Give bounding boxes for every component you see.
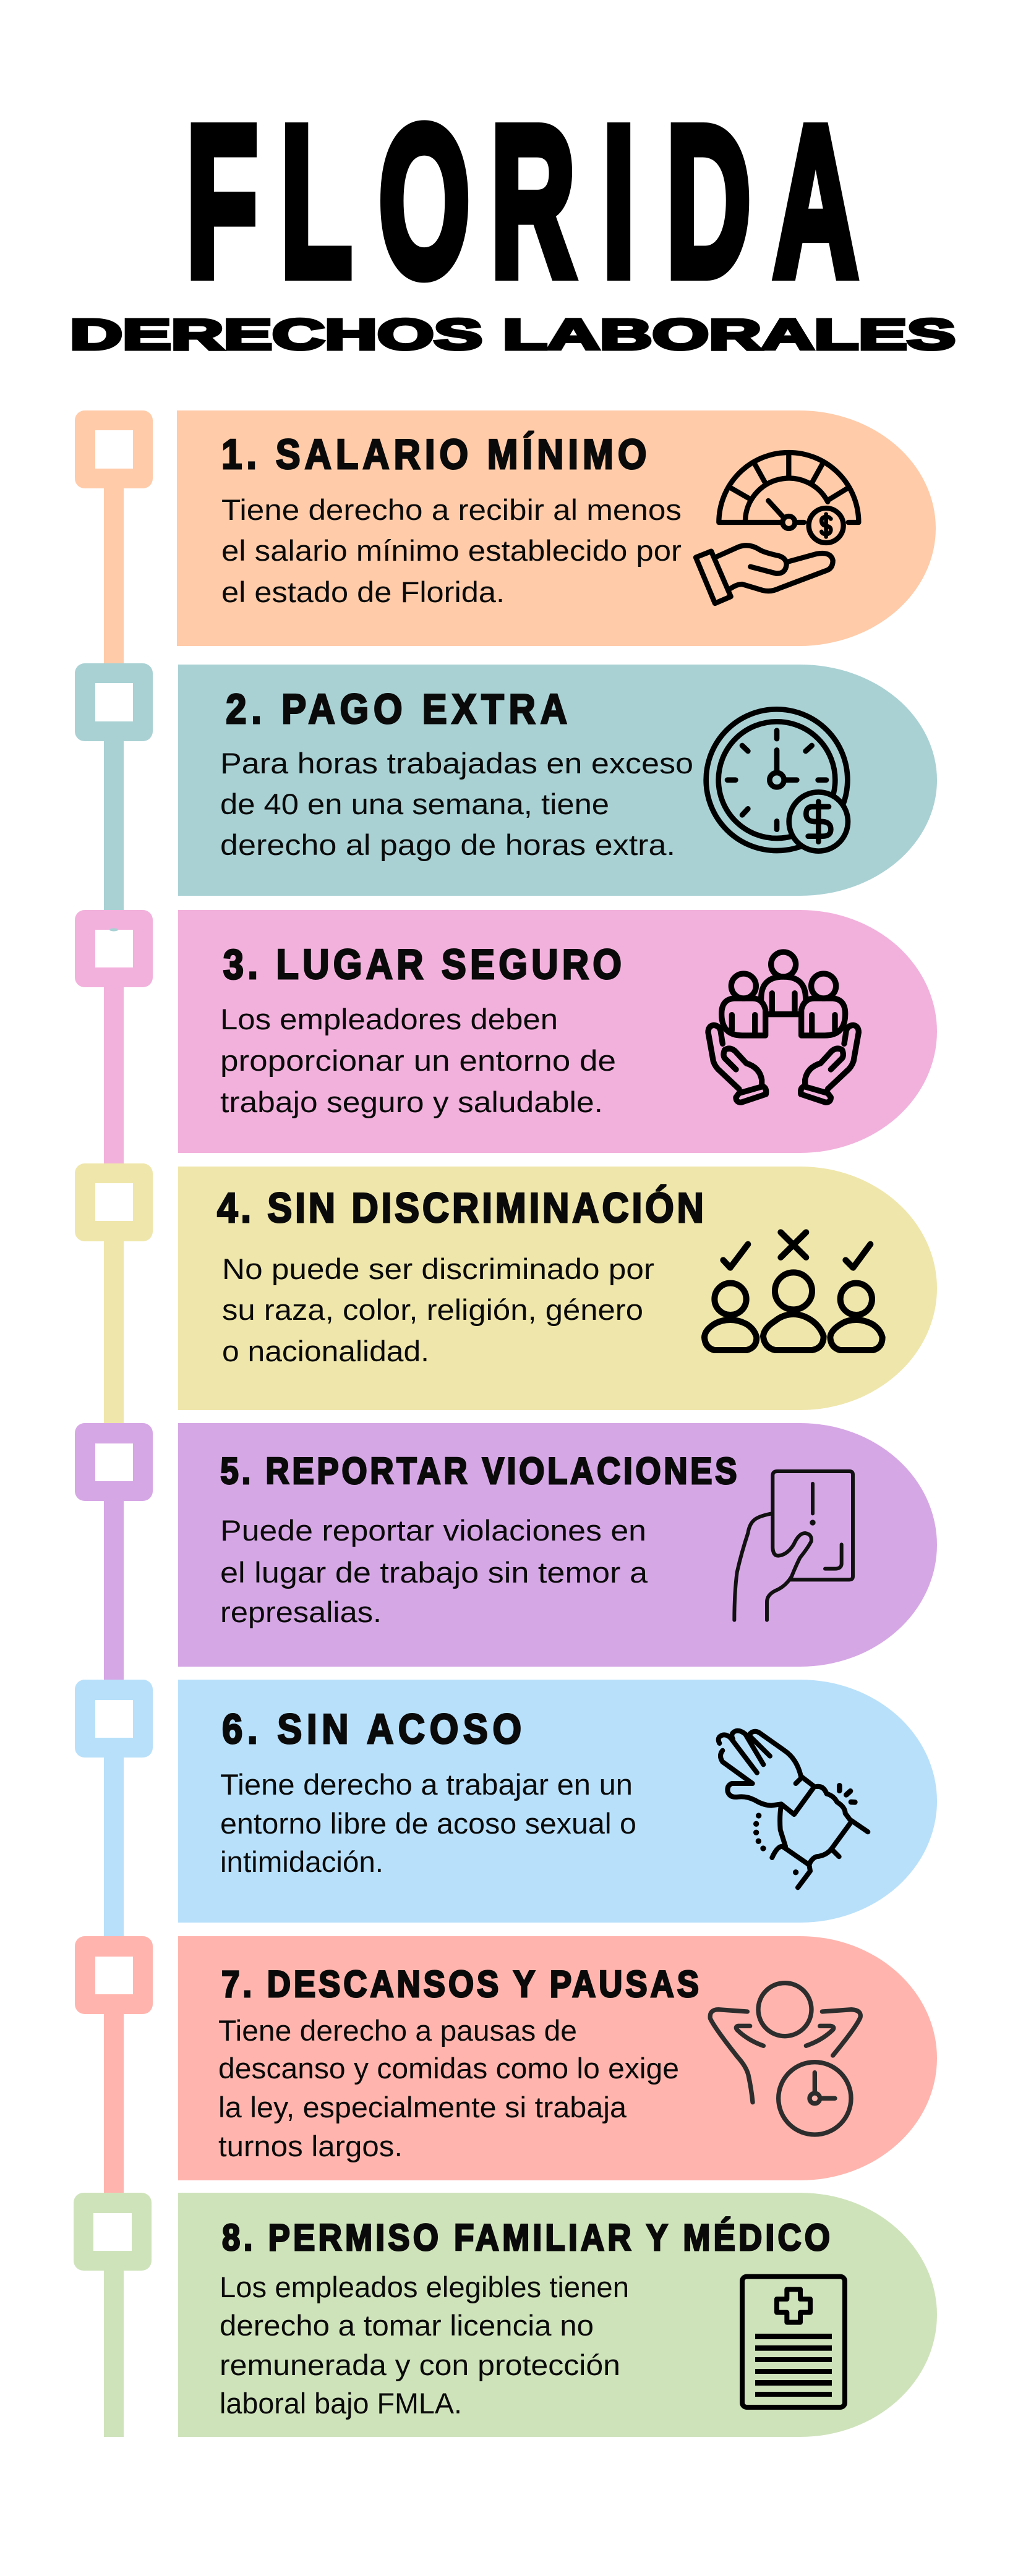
body text 5 [220, 1514, 648, 1628]
panel: 2 pago extra [75, 663, 937, 915]
heading 7: 7. DESCANSOS Y PAUSAS [221, 1963, 699, 2005]
body text 3: proporcionar un entorno de [220, 1044, 616, 1077]
body text 7: Tiene derecho a pausas de [218, 2014, 577, 2047]
body text 7 [218, 2014, 679, 2162]
subtitle: DERECHOS LABORALES [70, 310, 956, 359]
card background 6 [178, 1680, 937, 1923]
heading 3: 3. LUGAR SEGURO [223, 940, 622, 988]
icon: relaxing person with clock [710, 1983, 860, 2135]
icon: clock with dollar coin [706, 709, 848, 851]
body text 4 [222, 1252, 654, 1367]
card background 2 [178, 665, 937, 896]
icon: medical document [742, 2277, 845, 2407]
body text 1: Tiene derecho a recibir al menos [221, 493, 682, 526]
icon: hand gripping wrist [719, 1731, 868, 1887]
body text 7: descanso y comidas como lo exige [218, 2052, 679, 2085]
card background 4 [178, 1167, 937, 1410]
timeline marker 3 [75, 910, 153, 987]
body text 5: el lugar de trabajo sin temor a [220, 1556, 648, 1589]
body text 7: turnos largos. [218, 2130, 403, 2162]
body text 1 [221, 493, 682, 608]
timeline marker 5 [75, 1423, 153, 1501]
heading 1: 1. SALARIO MÍNIMO [221, 430, 646, 478]
icon: hands holding people [708, 952, 858, 1102]
icon: gauge and hand with coin [696, 453, 858, 603]
timeline marker 4 [75, 1163, 153, 1241]
body text 8: derecho a tomar licencia no [220, 2309, 594, 2342]
card background 5 [178, 1423, 937, 1667]
body text 2: Para horas trabajadas en exceso [220, 747, 693, 780]
title: FLORIDA [186, 82, 858, 321]
panel: 1 salario minimo [75, 410, 936, 668]
body text 8: laboral bajo FMLA. [220, 2387, 462, 2420]
body text 5: Puede reportar violaciones en [220, 1514, 646, 1547]
heading 8: 8. PERMISO FAMILIAR Y MÉDICO [222, 2217, 830, 2258]
panel: 8 permiso familiar y medico [74, 2193, 937, 2437]
body text 6: entorno libre de acoso sexual o [220, 1807, 636, 1840]
body text 1: el estado de Florida. [221, 576, 505, 608]
body text 4: No puede ser discriminado por [222, 1252, 654, 1285]
body text 6: Tiene derecho a trabajar en un [220, 1768, 633, 1801]
timeline connector 8 [104, 2263, 124, 2437]
card background 1 [177, 410, 936, 646]
timeline connector 6 [104, 1753, 124, 1938]
panel: 6 sin acoso [75, 1680, 937, 1938]
body text 3: Los empleadores deben [220, 1003, 558, 1035]
body text 6: intimidación. [220, 1845, 383, 1878]
body text 8: Los empleados elegibles tienen [220, 2271, 629, 2303]
panel: 3 lugar seguro [75, 910, 937, 1168]
panel: 4 sin discriminacion [75, 1163, 937, 1425]
heading 6: 6. SIN ACOSO [222, 1705, 521, 1753]
body text 7: la ley, especialmente si trabaja [218, 2091, 627, 2123]
timeline marker 8 [74, 2193, 152, 2271]
timeline connector 1 [104, 482, 124, 668]
timeline connector 2 [104, 736, 124, 915]
timeline marker 1 [75, 410, 153, 488]
timeline connector 5 [104, 1496, 124, 1681]
timeline marker 2 [75, 663, 153, 741]
body text 5: represalias. [220, 1596, 382, 1628]
body text 3 [220, 1003, 616, 1118]
body text 8 [220, 2271, 629, 2420]
body text 2: de 40 en una semana, tiene [220, 788, 609, 820]
body text 4: o nacionalidad. [222, 1335, 429, 1367]
icon: hand holding warning card [734, 1471, 853, 1620]
heading 2: 2. PAGO EXTRA [226, 685, 567, 733]
card background 7 [178, 1936, 937, 2180]
body text 3: trabajo seguro y saludable. [220, 1086, 603, 1118]
panel: 7 descansos y pausas [75, 1936, 937, 2195]
body text 2: derecho al pago de horas extra. [220, 828, 675, 861]
heading 4: 4. SIN DISCRIMINACIÓN [217, 1184, 704, 1231]
body text 4: su raza, color, religión, género [222, 1293, 643, 1326]
body text 8: remunerada y con protección [220, 2349, 620, 2381]
card background 8 [178, 2193, 937, 2437]
heading 5: 5. REPORTAR VIOLACIONES [220, 1450, 737, 1492]
timeline connector 7 [104, 2009, 124, 2195]
timeline connector 4 [104, 1236, 124, 1425]
body text 1: el salario mínimo establecido por [221, 534, 682, 567]
timeline connector 3 [104, 983, 124, 1168]
body text 2 [220, 747, 693, 861]
body text 6 [220, 1768, 636, 1878]
icon: three people with checks and cross [704, 1232, 883, 1350]
card background 3 [178, 910, 937, 1153]
timeline marker 6 [75, 1680, 153, 1758]
panel: 5 reportar violaciones [75, 1423, 937, 1681]
timeline marker 7 [75, 1936, 153, 2014]
